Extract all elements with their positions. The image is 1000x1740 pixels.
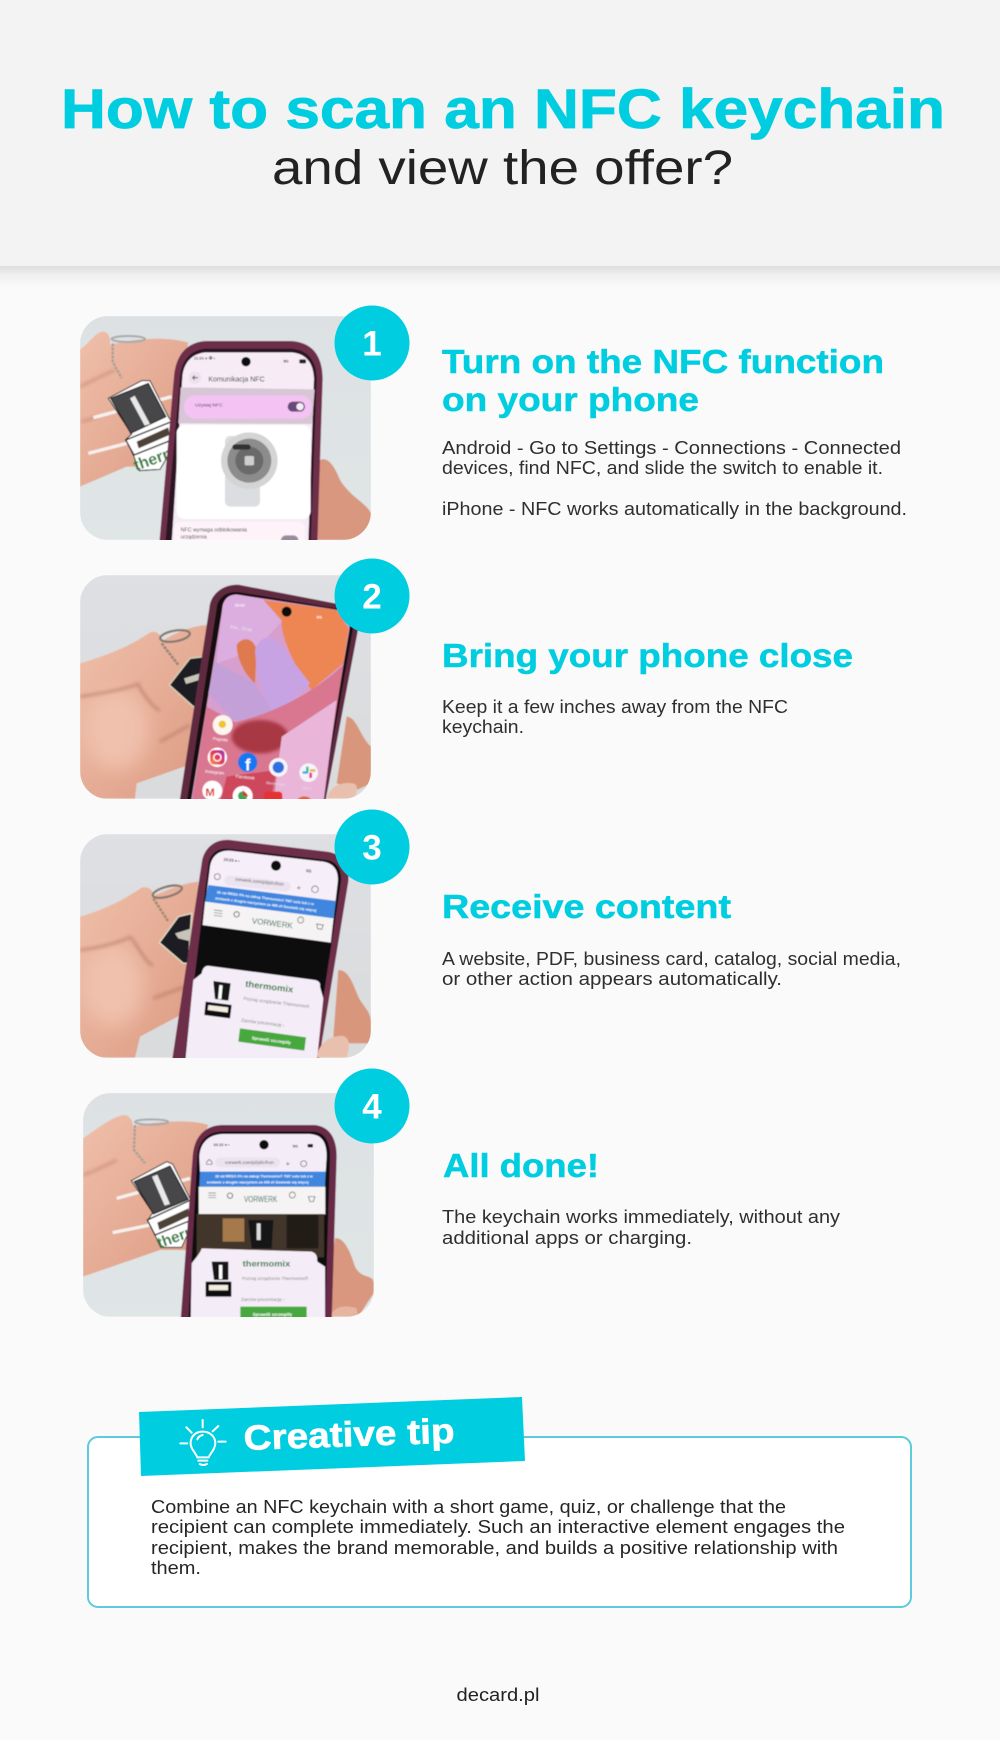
- photo: hand holding keychain and phone with NFC settings: Komunikacja NFC: [208, 376, 265, 383]
- photo: keychain beside phone with offer page: Sprawdź szczegóły: [253, 1312, 293, 1317]
- number badge 4: 4: [362, 1088, 382, 1126]
- photo: keychain beside phone with offer page: Zamów prezentację ›: [241, 1297, 285, 1302]
- step 3 panel: [80, 810, 901, 1063]
- tip text: recipient, makes the brand memorable, and builds a positive relationship with: [151, 1537, 838, 1558]
- photo: keychain beside phone with offer page: Poznaj urządzenie Thermomix®: [242, 1275, 309, 1281]
- photo: phone showing website after scan: Sprawdź szczegóły: [252, 1035, 292, 1045]
- photo: phone home screen near keychain: M: [205, 787, 215, 799]
- photo: phone home screen near keychain: Pon., 23 lut: [230, 624, 253, 632]
- step 2 panel: [80, 558, 853, 814]
- step 1 text: iPhone - NFC works automatically in the background.: [442, 498, 907, 519]
- number badge 4: [334, 1068, 410, 1144]
- photo: phone home screen near keychain: 5G: [317, 614, 322, 619]
- step 3 heading: Receive content: [442, 888, 731, 925]
- footer: website: decard.pl: [456, 1684, 540, 1705]
- photo: phone home screen near keychain: Messenger: [266, 780, 287, 787]
- photo: phone home screen near keychain: Instagram: [205, 769, 225, 776]
- tip text: them.: [151, 1557, 201, 1578]
- step 4 panel: [83, 1068, 841, 1322]
- title: [61, 77, 945, 195]
- photo: keychain beside phone with offer page: thermomix: [243, 1259, 291, 1269]
- step 1 heading: [442, 343, 884, 418]
- photo: phone showing website after scan: zestawie z drugim naczyniem za 499 zł! Dowiedz się więcej: [215, 896, 317, 913]
- step 1 text: devices, find NFC, and slide the switch to enable it.: [442, 457, 883, 478]
- photo: hand holding keychain and phone with NFC settings: 11:21 ● ✿ ▪: [194, 356, 216, 361]
- photo: phone home screen near keychain: f: [245, 756, 251, 775]
- photo: phone showing website after scan: Zamów prezentację ›: [241, 1018, 285, 1028]
- step 1 text: [442, 437, 907, 519]
- photo: phone home screen near keychain: Slack: [302, 785, 312, 791]
- step 2 text: Keep it a few inches away from the NFC: [442, 696, 788, 717]
- step 1 heading: Turn on the NFC function: [442, 343, 884, 380]
- title: and view the offer?: [272, 142, 733, 195]
- step 4 text: [442, 1206, 841, 1248]
- number badge 3: [334, 810, 410, 884]
- step 2 text: [442, 696, 788, 737]
- photo: phone showing website after scan: 36 rat RRSO 0% na zakup Thermomix® TM7 solo lub z w: [217, 890, 314, 906]
- tip text: Combine an NFC keychain with a short game, quiz, or challenge that the: [151, 1496, 786, 1517]
- photo: phone showing website after scan: thermomix: [245, 979, 294, 995]
- photo: hand holding keychain and phone with NFC settings: NFC wymaga odblokowania: [181, 528, 247, 534]
- photo: keychain beside phone with offer page: therm: [155, 1222, 201, 1252]
- photo: keychain beside phone with offer page: VORWERK: [244, 1195, 278, 1204]
- photo: keychain beside phone with offer page: +: [286, 1159, 290, 1168]
- photo: keychain beside phone with offer page: [83, 1093, 374, 1322]
- photo: keychain beside phone with offer page: 10:22 ● ▪: [213, 1142, 230, 1147]
- photo: hand holding keychain and phone with NFC settings: 5G: [283, 359, 289, 364]
- photo: phone showing website after scan: VORWERK: [251, 916, 294, 930]
- number badge 2: 2: [362, 578, 382, 616]
- photo: phone home screen near keychain: [80, 575, 371, 814]
- step 3 text: or other action appears automatically.: [442, 968, 782, 989]
- number badge 1: [334, 306, 410, 380]
- icon: light bulb: [180, 1420, 226, 1465]
- step 2 text: keychain.: [442, 716, 524, 737]
- tip banner: [139, 1397, 525, 1476]
- step 3 text: A website, PDF, business card, catalog, social media,: [442, 948, 901, 969]
- photo: hand holding keychain and phone with NFC settings: Używaj NFC: [195, 402, 223, 408]
- step 4 heading: All done!: [443, 1147, 599, 1184]
- step 1 text: Android - Go to Settings - Connections - Connected: [442, 437, 901, 458]
- panel: creative tip: [88, 1397, 911, 1607]
- step 4 text: additional apps or charging.: [442, 1227, 692, 1248]
- photo: phone home screen near keychain: 10:22: [235, 603, 246, 608]
- header band: [0, 0, 1000, 288]
- number badge 3: 3: [362, 828, 382, 868]
- photo: keychain beside phone with offer page: 36 rat RRSO 0% na zakup Thermomix® TM7 solo lub z w: [215, 1174, 313, 1178]
- step 4 text: The keychain works immediately, without any: [442, 1206, 841, 1227]
- photo: phone home screen near keychain: Pogoda: [213, 736, 229, 743]
- photo: phone showing website after scan: vorwerk.com/pl/pl/c/hon: [235, 877, 284, 887]
- photo: hand holding keychain and phone with NFC settings: therm: [132, 444, 179, 475]
- photo: phone showing website after scan: 10:23 ● ▪: [223, 857, 240, 863]
- tip heading: Creative tip: [243, 1412, 455, 1458]
- photo: phone showing website after scan: +: [297, 883, 301, 892]
- photo: phone showing website after scan: Poznaj urządzenie Thermomix®: [243, 995, 310, 1009]
- step 1 heading: on your phone: [442, 381, 699, 418]
- photo: keychain beside phone with offer page: zestawie z drugim naczyniem za 499 zł! Dowiedz się więcej: [207, 1180, 309, 1184]
- step 2 heading: Bring your phone close: [442, 637, 853, 674]
- title: How to scan an NFC keychain: [61, 77, 945, 140]
- photo: phone home screen near keychain: Facebook: [236, 774, 256, 781]
- step 1 panel: [80, 306, 907, 548]
- number badge 2: [334, 558, 410, 634]
- number badge 1: 1: [362, 324, 382, 364]
- photo: keychain beside phone with offer page: vorwerk.com/pl/pl/c/hon: [225, 1160, 274, 1165]
- photo: hand holding keychain and phone with NFC settings: urządzenia: [181, 534, 207, 540]
- tip text: [151, 1496, 845, 1578]
- photo: keychain beside phone with offer page: 5G: [293, 1143, 298, 1148]
- step 3 text: [442, 948, 901, 989]
- photo: phone showing website after scan: 5G: [306, 868, 312, 874]
- tip text: recipient can complete immediately. Such an interactive element engages the: [151, 1516, 845, 1537]
- photo: hand holding keychain and phone with NFC settings: [80, 316, 371, 548]
- tip box: [88, 1437, 911, 1607]
- photo: phone showing website after scan: [80, 834, 371, 1063]
